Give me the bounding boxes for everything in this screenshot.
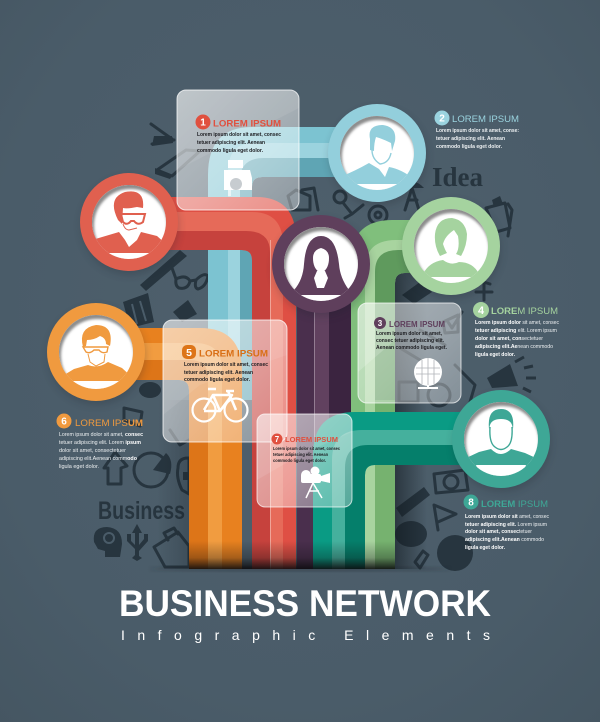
circle: teal person <box>452 390 551 492</box>
text block 1: tetuer adipiscing elit. Aenean <box>197 140 265 146</box>
text block 6: dolor sit amet, consectetuer <box>59 448 126 454</box>
text block 8: Lorem ipsum dolor sit amet, consec <box>465 514 549 520</box>
text block 8: dolor sit amet, consectetuer <box>465 529 532 535</box>
band floor shade <box>189 541 395 569</box>
doodle: usb <box>127 524 148 561</box>
band: teal connector <box>313 412 505 569</box>
text block 4: dolor sit amet, consectetuer <box>475 336 543 342</box>
text block 3: Lorem ipsum dolor sit amet, <box>376 331 443 337</box>
band shadows <box>150 270 450 571</box>
text block 7 <box>273 446 340 464</box>
text block 4 <box>475 320 559 358</box>
doodle: word Idea: Idea <box>432 162 483 192</box>
panel: 3 glass card <box>358 303 461 403</box>
doodle: word Business: Business <box>98 497 185 525</box>
icon: film camera on tripod <box>301 466 330 498</box>
doodle: magnifier, @ and tower <box>334 182 424 224</box>
doodle: globe <box>437 535 473 571</box>
text block 4: Lorem ipsum dolor sit amet, consec <box>475 320 559 326</box>
badge 1: 1 <box>200 118 206 128</box>
text block 6 <box>59 432 143 470</box>
text block 6: tetuer adipiscing elit. Lorem ipsum <box>59 440 141 446</box>
text block 6: adipiscing elit.Aenean commodo <box>59 456 138 462</box>
doodle: briefcase <box>154 528 189 567</box>
band: orange connector <box>96 328 242 569</box>
doodle: camera <box>434 470 468 493</box>
doodle: arrow shirt <box>104 452 127 484</box>
heading 5: LOREM IPSUM <box>199 348 268 360</box>
text block 8: ligula eget dolor. <box>465 545 505 551</box>
doodle: phone, watch and bag <box>399 330 475 406</box>
text block 2: commodo ligula eget dolor. <box>436 144 502 150</box>
badge 8: 8 <box>468 498 474 508</box>
text block 2: Lorem ipsum dolor sit amet, conse: <box>436 128 519 134</box>
text block 3 <box>376 331 448 351</box>
heading 8: LOREM IPSUM <box>481 499 548 510</box>
heading 3: LOREM IPSUM <box>389 320 445 329</box>
text block 4: adipiscing elit.Aenean commodo <box>475 344 553 350</box>
doodle: head with gear <box>94 527 122 557</box>
panel: 5 glass card <box>163 320 287 442</box>
heading 2: LOREM IPSUM <box>452 114 519 125</box>
text block 2 <box>436 128 519 150</box>
doodle: mouse <box>415 551 428 568</box>
band: red connector <box>130 197 296 569</box>
text block 1: commodo ligula eget dolor. <box>197 148 263 154</box>
doodle: tablet <box>124 408 142 426</box>
doodle: pennant <box>434 505 456 530</box>
text block 7: tetuer adipiscing elit. Aenean <box>273 452 328 458</box>
doodle: pen <box>140 250 187 291</box>
text block 5: Lorem ipsum dolor sit amet, consec <box>184 362 268 368</box>
doodle: check box <box>443 312 462 333</box>
badge 4: 4 <box>478 305 485 317</box>
badge 5: 5 <box>186 347 192 359</box>
circle: blue person <box>328 104 427 206</box>
doodle icons background <box>94 124 536 571</box>
doodle: brain <box>395 521 427 547</box>
circle: purple person <box>272 215 371 317</box>
text block 7: commodo ligula eget dolor. <box>273 458 326 464</box>
heading 6: LOREM IPSUM <box>75 418 143 429</box>
text block 1 <box>197 132 281 154</box>
circle: green person <box>402 197 501 299</box>
text block 6: ligula eget dolor. <box>59 464 99 470</box>
text block 2: tetuer adipiscing elit. Aenean <box>436 136 506 142</box>
circle: red person <box>80 173 179 275</box>
badge 6: 6 <box>61 416 67 428</box>
icon: bicycle <box>192 389 248 422</box>
doodle: notepad <box>402 282 432 304</box>
doodle: paper block <box>288 188 318 210</box>
text block 3: Aenean commodo ligula eget. <box>376 345 448 351</box>
text block 5: commodo ligula eget dolor. <box>184 377 250 383</box>
doodle: light bulb <box>178 458 189 494</box>
block 6 <box>56 414 143 470</box>
text block 3: consec tetuer adipiscing elit. <box>376 338 445 344</box>
text block 7: Lorem ipsum dolor sit amet, consec <box>273 446 340 452</box>
doodle: books <box>123 293 197 328</box>
doodle: cookie <box>139 382 161 398</box>
icon: globe <box>414 358 442 389</box>
doodle: scale icon <box>476 280 492 300</box>
title: BUSINESS NETWORK <box>119 583 491 624</box>
block 4 <box>473 302 559 358</box>
text block 5: tetuer adipiscing elit. Aenean <box>184 370 254 376</box>
band: purple connector <box>297 264 351 569</box>
doodle: paper tool <box>155 150 200 179</box>
circle: orange person <box>47 303 146 405</box>
panel: 7 glass card <box>257 414 352 507</box>
text block 4: ligula eget dolor. <box>475 352 515 358</box>
text block 4: tetuer adipiscing elit. Lorem ipsum <box>475 328 557 334</box>
panel: 1 glass card <box>177 90 299 210</box>
doodle: megaphone <box>487 357 536 392</box>
badge 7: 7 <box>275 435 280 444</box>
band: blue connector <box>208 127 380 400</box>
badge 3: 3 <box>378 319 383 328</box>
text block 6: Lorem ipsum dolor sit amet, consec <box>59 432 143 438</box>
text block 8 <box>465 514 549 551</box>
text block 8: tetuer adipiscing elit. Lorem ipsum <box>465 522 547 528</box>
heading 4: LOREM IPSUM <box>491 306 558 317</box>
doodle: glasses <box>172 268 208 289</box>
doodle: envelope <box>170 430 189 445</box>
subtitle: Infographic Elements <box>121 627 490 643</box>
icon: camera <box>224 160 252 196</box>
text block 8: adipiscing elit.Aenean commodo <box>465 537 544 543</box>
block 8 <box>464 494 549 551</box>
heading 7: LOREM IPSUM <box>285 435 338 444</box>
block 2 <box>434 110 519 150</box>
doodle: pie chart <box>134 453 171 487</box>
doodle: ruler <box>396 487 430 517</box>
band: green connector <box>350 220 455 569</box>
heading 1: LOREM IPSUM <box>213 118 281 130</box>
text block 1: Lorem ipsum dolor sit amet, consec <box>197 132 281 138</box>
text block 5 <box>184 362 268 383</box>
badge 2: 2 <box>439 114 445 124</box>
doodle: stapler <box>151 124 174 146</box>
doodle: clipboard <box>486 196 512 236</box>
